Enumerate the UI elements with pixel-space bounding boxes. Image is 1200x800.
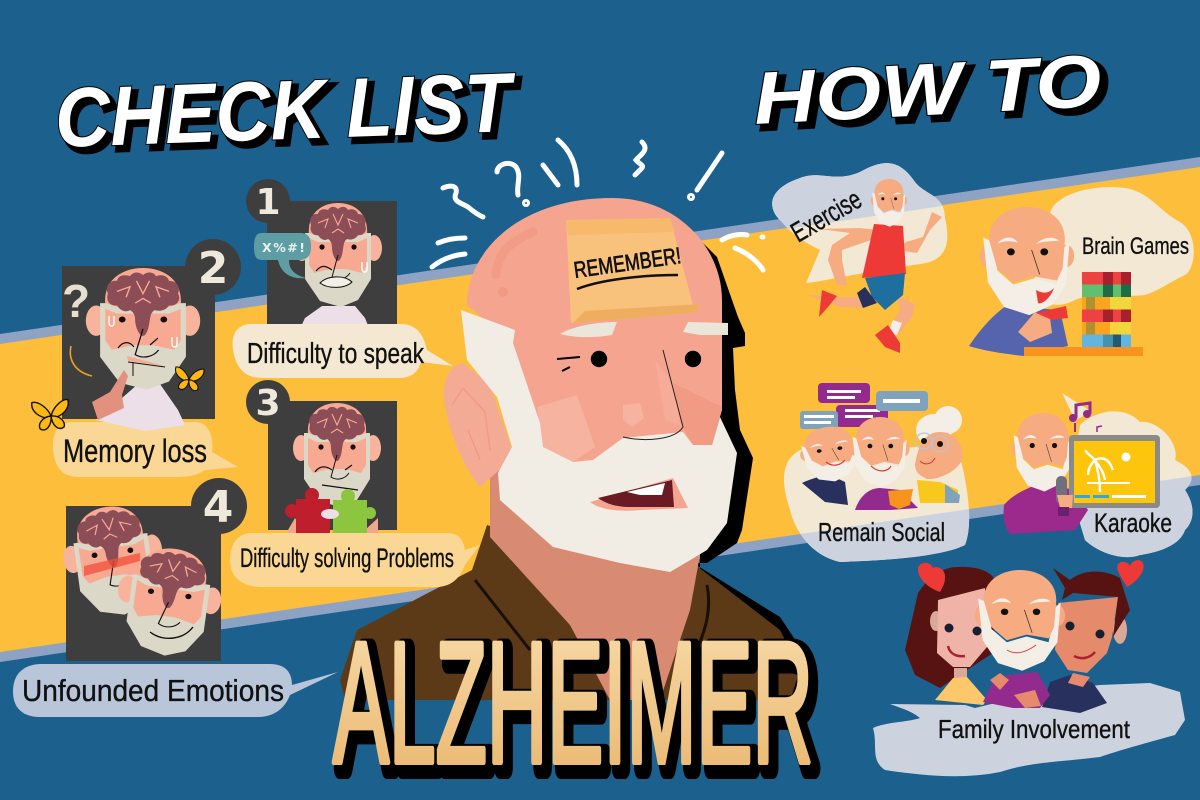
black shadow outline	[687, 227, 812, 700]
girl	[905, 567, 995, 705]
speech label: memory loss: Memory loss	[63, 433, 207, 469]
angry head	[57, 500, 170, 622]
confusion marks	[432, 140, 763, 270]
grandma	[915, 406, 963, 503]
white hair and beard	[461, 310, 737, 572]
sticky note	[566, 218, 700, 323]
mouth	[590, 478, 688, 511]
runner	[807, 179, 942, 353]
head	[293, 403, 381, 507]
how to: karaoke	[1004, 393, 1192, 557]
speech label: difficulty solving problems: Difficulty solving Problems	[240, 543, 454, 573]
panel 2: memory loss	[32, 266, 238, 477]
how to: family involvement	[873, 560, 1185, 776]
number badges: 4	[203, 482, 233, 533]
head	[86, 268, 200, 390]
how to: remain social	[784, 383, 969, 562]
panel: central man	[340, 198, 812, 700]
shirt	[1004, 483, 1088, 534]
block tower	[1082, 272, 1131, 347]
speech label: difficulty solving problems	[230, 533, 480, 587]
brown shirt	[340, 525, 800, 700]
hand	[1018, 312, 1052, 342]
nose	[623, 350, 683, 440]
label: Remain Social	[818, 517, 945, 547]
number badges: 1	[255, 182, 281, 223]
panel 3: difficulty solving problems	[230, 401, 480, 587]
speech bubble	[254, 233, 311, 278]
title: how to: HOW TO	[751, 39, 1103, 140]
centre man	[850, 417, 918, 510]
shirt	[297, 306, 372, 335]
smiling head	[110, 542, 227, 662]
elder	[980, 207, 1074, 315]
left man	[797, 423, 863, 505]
cloud	[1062, 393, 1192, 557]
speech label: difficulty to speak: Difficulty to speak	[247, 338, 424, 370]
eyes	[591, 351, 607, 367]
skull and face	[467, 198, 722, 462]
label: Karaoke	[1094, 508, 1172, 538]
number badges: 2	[198, 243, 228, 294]
speech label: memory loss	[53, 422, 238, 477]
cloud	[873, 683, 1185, 776]
red puzzle piece	[285, 488, 330, 541]
head	[294, 203, 382, 307]
cloud	[784, 440, 969, 562]
sweat drops	[109, 316, 114, 326]
speech label: unfounded emotions	[13, 664, 338, 717]
number badges: 3	[255, 383, 281, 424]
number badges	[185, 179, 290, 534]
butterflies	[32, 367, 204, 431]
hands	[288, 518, 312, 540]
hearts	[918, 563, 945, 592]
microphone	[1056, 476, 1067, 504]
label: Family Involvement	[938, 714, 1131, 744]
chat bubbles	[800, 383, 928, 429]
cloud	[772, 163, 947, 283]
title: how to: HOW TO	[757, 44, 1109, 145]
coffee cup	[888, 489, 913, 509]
elder shirt	[969, 306, 1068, 356]
speech label: difficulty to speak	[233, 324, 453, 378]
how to: exercise	[772, 163, 947, 353]
sticky note: REMEMBER!	[572, 242, 683, 283]
eyebrows	[560, 322, 617, 337]
elder	[975, 570, 1065, 708]
question mark: ?	[62, 275, 90, 327]
ear	[444, 363, 512, 487]
shirt	[96, 384, 185, 431]
label: Exercise	[786, 183, 867, 248]
speech label: unfounded emotions: Unfounded Emotions	[22, 673, 284, 708]
green puzzle piece	[333, 489, 376, 543]
neck	[490, 470, 700, 700]
elder	[1011, 413, 1075, 491]
hand	[92, 370, 128, 420]
title: check list: CHECK LIST	[58, 60, 523, 170]
karaoke screen	[1069, 435, 1160, 508]
speech bubble: X%#!	[262, 240, 305, 255]
boy	[1042, 568, 1130, 713]
panel 1: difficulty to speak	[233, 201, 453, 378]
music notes	[1070, 403, 1102, 432]
title: alzheimer	[333, 607, 819, 800]
title: check list: CHECK LIST	[53, 55, 518, 165]
panel 4: unfounded emotions	[13, 500, 338, 717]
table	[1024, 347, 1143, 356]
cloud	[1034, 187, 1194, 305]
yellow diagonal band	[0, 157, 1200, 662]
how to: brain games	[969, 187, 1194, 356]
